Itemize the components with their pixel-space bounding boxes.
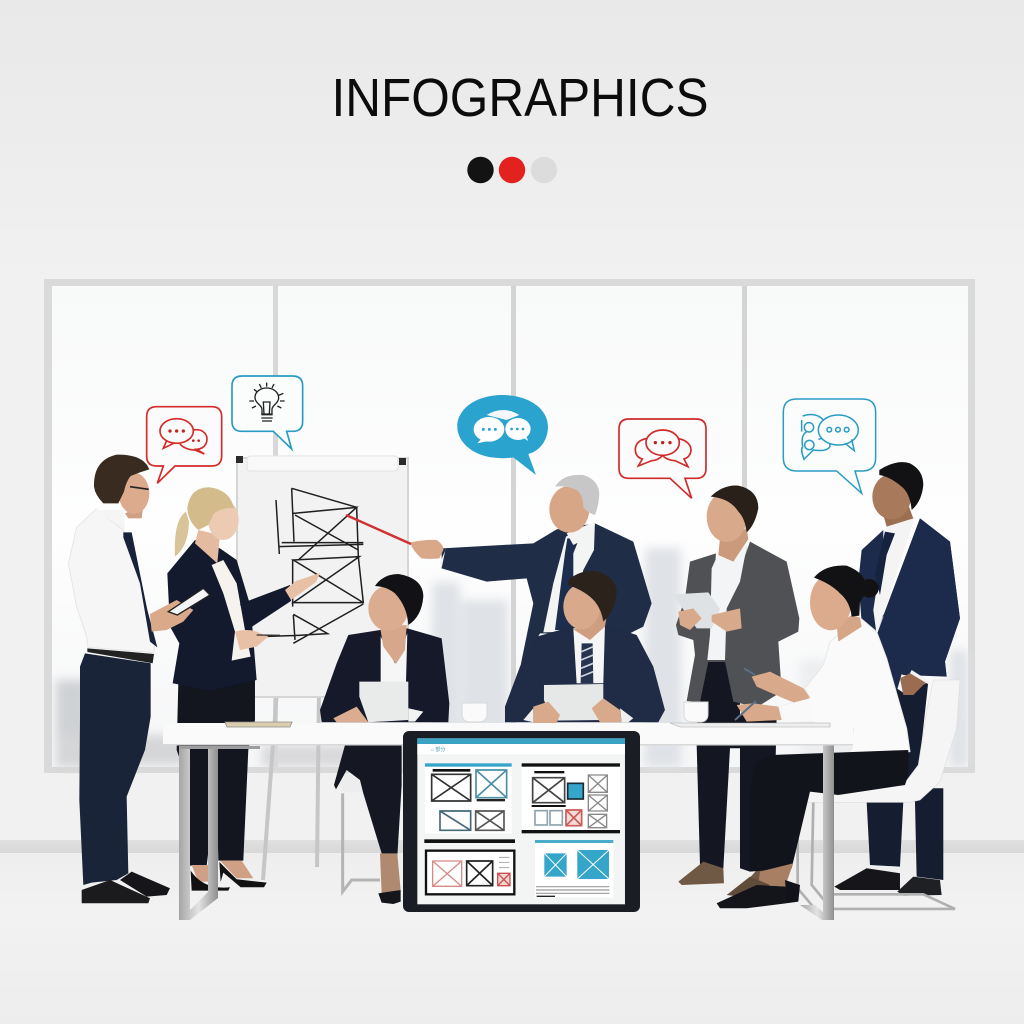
blazer <box>167 540 257 691</box>
flipchart <box>236 456 408 880</box>
neck <box>837 615 862 642</box>
trousers <box>750 750 908 872</box>
head <box>810 574 851 630</box>
person: man in white shirt <box>68 455 210 903</box>
hand <box>900 673 927 695</box>
person: seated woman <box>320 574 449 904</box>
papers <box>670 723 830 727</box>
ankle and shoes <box>758 863 793 887</box>
speech bubble: red double chat <box>619 419 706 498</box>
jacket <box>676 542 799 707</box>
raised sleeve <box>240 585 291 628</box>
head <box>125 505 143 518</box>
person: standing presenter <box>410 475 652 668</box>
head <box>707 491 747 542</box>
speech bubble: blue network chat <box>783 399 876 493</box>
hand <box>410 540 443 559</box>
person: right seated woman, upper body <box>735 566 879 722</box>
coffee cup right <box>684 702 708 722</box>
title: INFOGRAPHICS <box>332 68 708 128</box>
jacket <box>858 518 960 692</box>
wireframe panel 4 <box>535 840 613 898</box>
trousers <box>334 745 402 857</box>
neck and head <box>195 530 220 563</box>
speech bubble: red chat <box>147 407 222 483</box>
chrome chair frame <box>798 800 955 919</box>
brown shoes <box>678 862 724 885</box>
person: man in grey blazer <box>673 486 799 888</box>
hand <box>150 600 193 632</box>
person: blonde woman <box>167 487 320 891</box>
chair <box>343 793 380 892</box>
tablet <box>544 684 603 721</box>
window <box>44 279 975 773</box>
jacket <box>442 523 652 668</box>
icon: bulb <box>249 383 285 421</box>
speech bubble: light bulb <box>232 376 303 449</box>
floor <box>0 840 1024 1024</box>
tablet screen top bar text: ⌂ 部分 <box>431 746 445 753</box>
trousers <box>177 663 255 866</box>
heels <box>192 865 208 882</box>
tablet <box>168 588 210 615</box>
coffee cup left <box>462 703 487 722</box>
person: man at far right <box>834 462 960 896</box>
person: seated man <box>505 571 665 723</box>
open tablet <box>359 682 408 722</box>
trousers <box>867 682 943 880</box>
colour dots <box>467 157 557 183</box>
wireframe panel 1 <box>425 763 512 833</box>
tablet with wireframes <box>403 731 640 912</box>
wireframe panel 3 <box>424 839 515 894</box>
hand <box>235 630 268 650</box>
pointing hand <box>285 573 320 600</box>
city skyline <box>56 548 968 767</box>
head <box>567 522 595 545</box>
folder on table <box>225 722 292 727</box>
head <box>883 505 913 527</box>
tablet <box>673 592 720 628</box>
flipchart sketch <box>260 488 363 643</box>
table <box>163 702 853 920</box>
shirt <box>68 509 155 653</box>
speech bubble: filled blue chat <box>457 395 548 475</box>
shoes <box>120 872 170 897</box>
belt <box>87 648 154 663</box>
wireframe panel 2 <box>522 763 620 833</box>
person: right seated woman, legs and chair <box>717 618 960 919</box>
shirt <box>778 618 910 757</box>
shoes <box>834 868 900 890</box>
pointer stick <box>346 515 411 544</box>
arm and hands <box>752 672 809 708</box>
white chair <box>797 680 960 802</box>
trousers <box>79 653 151 885</box>
trousers <box>697 662 777 872</box>
